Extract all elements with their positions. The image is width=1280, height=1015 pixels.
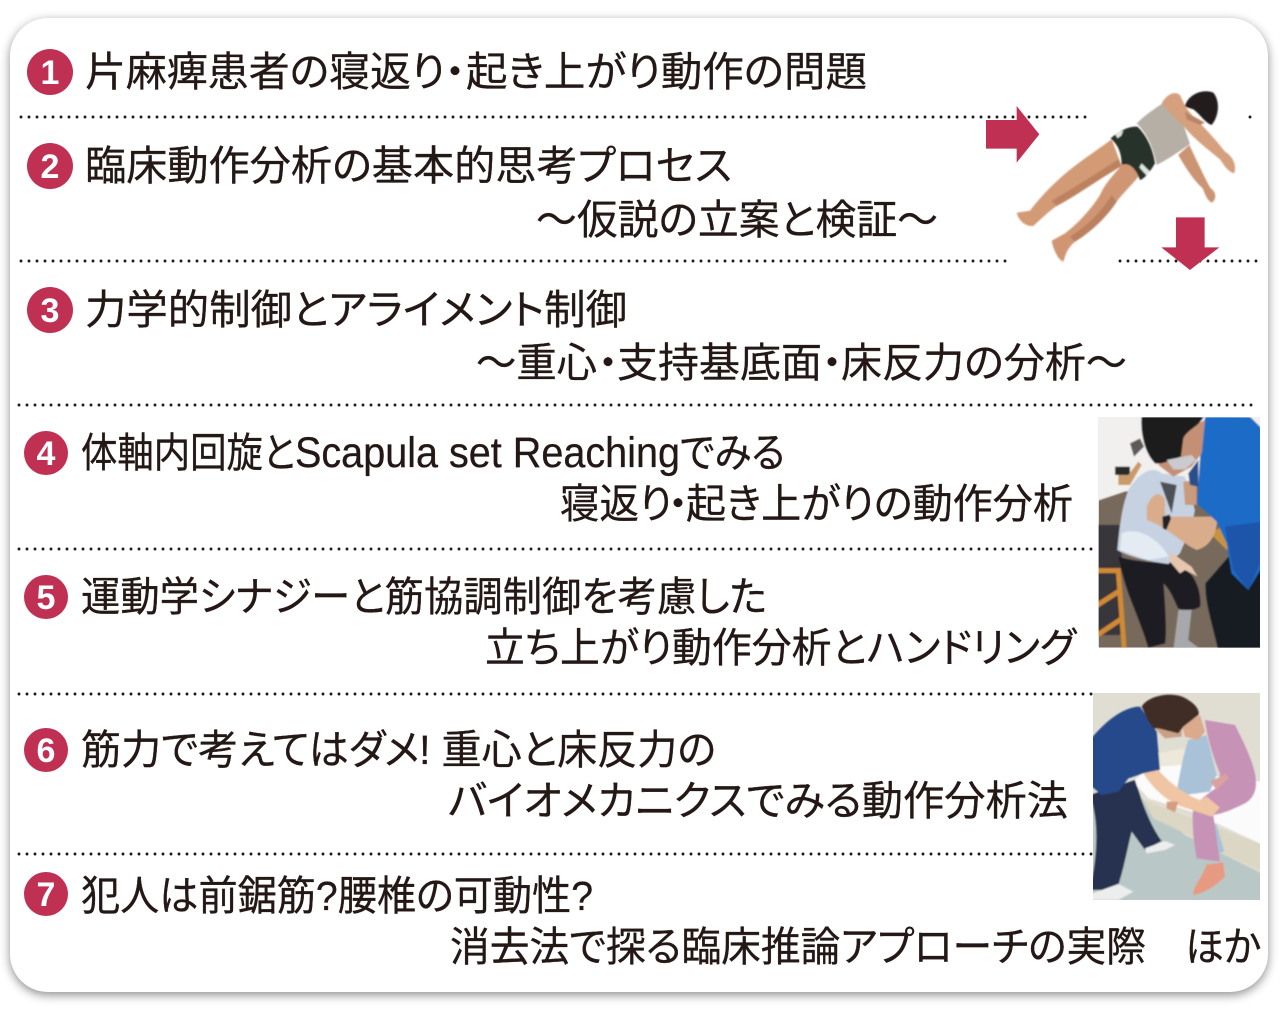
item 3: ～重心 xyxy=(476,340,597,386)
patient shirt xyxy=(1117,470,1195,564)
item 4: 起き上がりの動作分析 xyxy=(686,481,1073,527)
patient blue xyxy=(1177,735,1217,795)
item 2: 2 xyxy=(41,148,59,186)
item 2: 臨床動作分析の基本的思考プロセス xyxy=(85,143,732,189)
item 7: 犯人は前鋸筋?腰椎の可動性? xyxy=(81,873,593,919)
item 2: ～仮説の立案と検証～ xyxy=(536,197,938,243)
item 3: 床反力の分析～ xyxy=(841,340,1127,386)
lower arm xyxy=(1178,145,1215,203)
item 6: バイオメカニクスでみる動作分析法 xyxy=(448,778,1068,824)
item 3 xyxy=(27,287,1127,386)
item 3: ・ xyxy=(812,340,852,386)
bed xyxy=(1143,800,1263,872)
photo: therapist assisting seated patient xyxy=(1095,413,1263,650)
illustration: person lying with force arrows xyxy=(986,91,1235,270)
item 1: 起き上がり動作の問題 xyxy=(466,49,867,95)
near leg xyxy=(1052,163,1143,262)
item 3: 支持基底面 xyxy=(617,340,822,386)
socks xyxy=(1173,610,1202,650)
item 7 xyxy=(24,872,1261,970)
item 4: 体軸内回旋と xyxy=(81,430,295,476)
item 3: 力学的制御とアライメント制御 xyxy=(85,287,627,333)
item 3: ・ xyxy=(588,340,628,386)
therapist shirt xyxy=(1197,415,1263,590)
arrow: right xyxy=(986,106,1039,163)
far leg xyxy=(1017,139,1122,226)
item 1 xyxy=(27,49,867,95)
therapist arm xyxy=(1147,494,1217,550)
item 1: 1 xyxy=(41,54,59,92)
patient pink xyxy=(1193,720,1256,862)
therapist shirt xyxy=(1090,707,1160,795)
upper arm xyxy=(1162,93,1235,173)
item 4: 寝返り xyxy=(560,481,672,527)
item 5: 立ち上がり動作分析とハンドリング xyxy=(485,625,1078,671)
item 2 xyxy=(27,143,938,243)
heads xyxy=(1182,715,1205,740)
item 6 xyxy=(24,727,1068,824)
patient trousers xyxy=(1118,557,1200,648)
item 5: 運動学シナジーと筋協調制御を考慮した xyxy=(81,574,767,620)
foot xyxy=(1193,862,1225,895)
item 1: 片麻痺患者の寝返り xyxy=(85,49,445,95)
item 5 xyxy=(24,574,1078,671)
item 4: ・ xyxy=(658,481,698,527)
therapist trousers xyxy=(1090,780,1162,890)
item 6: 6 xyxy=(37,732,55,770)
item 5: 5 xyxy=(37,579,55,617)
item 4: 4 xyxy=(37,435,56,473)
head xyxy=(1185,112,1205,125)
therapist arm xyxy=(1143,770,1220,817)
item 1: ・ xyxy=(434,49,476,95)
shirt xyxy=(1137,103,1190,165)
item 7: 7 xyxy=(37,876,55,914)
shorts xyxy=(1111,127,1155,180)
item 6: 筋力で考えてはダメ! 重心と床反力の xyxy=(81,727,716,773)
item 4: Scapula set Reaching xyxy=(295,429,680,477)
item 3: 3 xyxy=(41,292,59,330)
photo: therapist handling patient on bed xyxy=(1088,693,1265,905)
item 4 xyxy=(24,429,1073,527)
head xyxy=(1158,420,1205,477)
arrow: down xyxy=(1161,217,1219,270)
item 4: でみる xyxy=(680,430,785,476)
item 7: 消去法で探る臨床推論アプローチの実際 xyxy=(450,924,1146,970)
therapist trousers xyxy=(1206,553,1263,650)
item 7: ほか xyxy=(1185,924,1261,970)
